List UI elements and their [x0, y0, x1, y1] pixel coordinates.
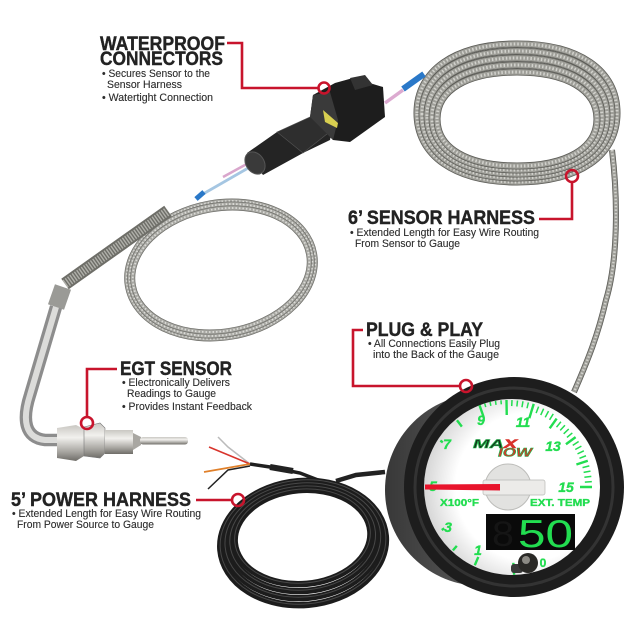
- waterproof connector: [196, 74, 424, 199]
- callout: EGT sensor: • Electronically Delivers: [122, 377, 231, 389]
- callout: sensor harness: From Sensor to Gauge: [355, 238, 460, 250]
- power harness coil: [215, 464, 391, 612]
- reset button: 0: [540, 556, 547, 570]
- callout: plug and play: PLUG & PLAY: [366, 320, 483, 341]
- callout: sensor harness: • Extended Length for Easy Wire Routing: [350, 227, 539, 239]
- callout: EGT sensor: EGT SENSOR: [120, 359, 232, 380]
- digital display: [486, 513, 575, 556]
- scale numbers: 9: [477, 412, 485, 428]
- logo: IOW: [498, 448, 534, 460]
- scale numbers: 11: [516, 414, 530, 430]
- logo: MA X: [473, 437, 519, 451]
- gauge: EXT. TEMP: [530, 497, 590, 509]
- digital display: 50: [518, 513, 573, 556]
- scale numbers: 5: [429, 478, 437, 494]
- gauge dial: [424, 399, 600, 575]
- sensor harness coil (top right): [417, 44, 617, 392]
- sensor cable coil (left): [116, 187, 326, 353]
- power harness wires: [204, 437, 250, 489]
- reset button: [511, 553, 547, 573]
- scale numbers: 3: [444, 519, 452, 535]
- logo: [473, 437, 534, 460]
- callout: EGT sensor: • Provides Instant Feedback: [122, 401, 253, 413]
- unit labels: X100°F: [440, 497, 480, 509]
- scale numbers: 13: [545, 438, 561, 454]
- scale numbers: 7: [443, 436, 452, 452]
- callout: plug and play: • All Connections Easily Plug: [368, 338, 500, 350]
- digital display: 8: [492, 515, 514, 554]
- callout: waterproof connectors: • Watertight Connection: [102, 92, 213, 104]
- callout: power harness: • Extended Length for Easy Wire Routing: [12, 508, 201, 520]
- EGT sensor probe: [26, 211, 188, 461]
- callout: EGT sensor: Readings to Gauge: [127, 388, 216, 400]
- callout: waterproof connectors: WATERPROOF: [100, 34, 225, 55]
- callout: power harness: 5’ POWER HARNESS: [11, 490, 191, 511]
- gauge: [385, 377, 624, 597]
- knob and needle: [425, 464, 545, 510]
- callout: EGT sensor: [81, 359, 253, 429]
- callout: waterproof connectors: CONNECTORS: [100, 49, 223, 70]
- gauge bezel: [404, 377, 624, 597]
- scale ticks: [440, 400, 592, 575]
- callout: plug and play: [353, 320, 500, 392]
- callout: power harness: [11, 490, 244, 531]
- callout: waterproof connectors: Sensor Harness: [107, 79, 183, 91]
- callout: sensor harness: 6’ SENSOR HARNESS: [348, 208, 535, 229]
- scale numbers: [429, 412, 574, 558]
- callout: sensor harness: [348, 170, 578, 250]
- callout: power harness: From Power Source to Gauge: [17, 519, 154, 531]
- callout: plug and play: into the Back of the Gauge: [373, 349, 499, 361]
- callout: waterproof connectors: • Secures Sensor to the: [102, 68, 210, 80]
- scale numbers: 15: [558, 479, 574, 495]
- scale numbers: 1: [474, 542, 482, 558]
- gauge housing: [385, 394, 579, 586]
- callout: waterproof connectors: [100, 34, 330, 104]
